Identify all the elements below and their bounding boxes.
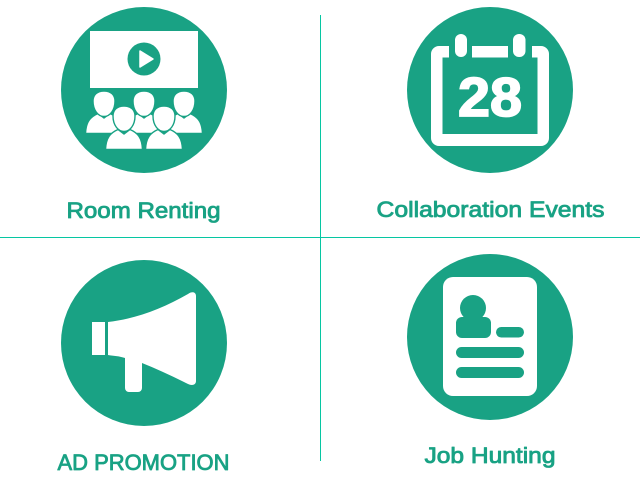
panel: job hunting: [407, 254, 573, 468]
label: Job Hunting: Job Hunting: [424, 443, 556, 468]
panel: collaboration events: [376, 7, 604, 222]
label: Room Renting: Room Renting: [66, 198, 220, 223]
icon: cinema audience with screen: [61, 7, 227, 173]
icon: resume document: [407, 254, 573, 420]
label: AD PROMOTION: AD PROMOTION: [58, 450, 230, 475]
panel: ad promotion: [58, 260, 230, 475]
icon: calendar showing 28: [407, 7, 573, 173]
icon: calendar showing 28: 28: [458, 66, 522, 128]
icon: megaphone: [61, 260, 227, 426]
label: Collaboration Events: Collaboration Events: [376, 197, 604, 222]
panel: room renting: [61, 7, 227, 223]
